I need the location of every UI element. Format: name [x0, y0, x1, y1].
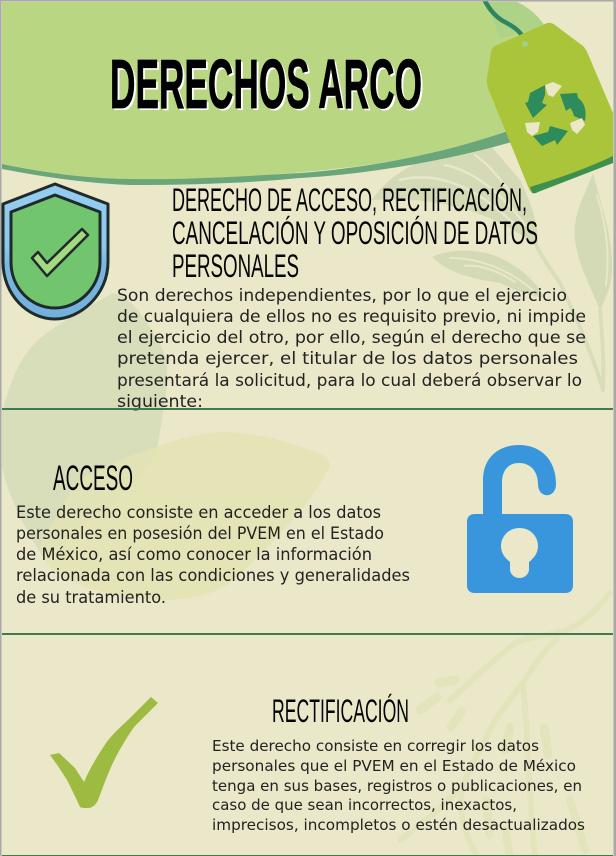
intro text: de cualquiera de ellos no es requisito previo, ni impide — [117, 307, 586, 326]
icon: shield with check — [3, 184, 108, 319]
text: rectificación: imprecisos, incompletos o estén desactualizados — [212, 816, 585, 834]
text: acceso — [16, 503, 410, 607]
main heading — [172, 182, 538, 284]
intro text — [117, 286, 586, 411]
icon: open padlock — [467, 445, 573, 593]
text: acceso: de su tratamiento. — [16, 588, 166, 607]
text: rectificación: personales que el PVEM en el Estado de México — [212, 757, 576, 775]
title — [110, 45, 424, 125]
text: acceso: personales en posesión del PVEM en el Estado — [16, 524, 384, 543]
text: rectificación — [212, 737, 585, 834]
main heading: PERSONALES — [172, 248, 299, 284]
background blob: left — [2, 293, 167, 557]
header green band — [2, 2, 545, 185]
background plant: top right — [372, 145, 612, 390]
intro text: siguiente: — [117, 392, 203, 411]
divider — [2, 633, 613, 635]
text: rectificación: caso de que sean incorrectos, inexactos, — [212, 796, 517, 814]
text: acceso: relacionada con las condiciones y generalidades — [16, 566, 410, 585]
background blob: centre — [40, 432, 329, 600]
text: rectificación: Este derecho consiste en corregir los datos — [212, 737, 539, 755]
icon: green check mark — [50, 697, 158, 808]
icon: recycling tag — [485, 1, 613, 193]
text: acceso: Este derecho consiste en acceder a los datos — [16, 503, 381, 522]
intro text: presentará la solicitud, para lo cual deberá observar lo — [117, 371, 582, 390]
intro text: Son derechos independientes, por lo que el ejercicio — [117, 286, 567, 305]
text: acceso: de México, así como conocer la información — [16, 545, 372, 564]
icon: recycle arrows — [525, 82, 586, 146]
text: rectificación: tenga en sus bases, registros o publicaciones, en — [212, 777, 582, 795]
background plant: bottom right — [400, 593, 610, 856]
heading: acceso: ACCESO — [53, 459, 133, 498]
intro text: el ejercicio del otro, por ello, según el derecho que se — [117, 328, 586, 347]
heading: rectificación: RECTIFICACIÓN — [272, 693, 409, 729]
divider — [2, 408, 613, 410]
intro text: pretenda ejercer, el titular de los datos personales — [117, 349, 578, 368]
